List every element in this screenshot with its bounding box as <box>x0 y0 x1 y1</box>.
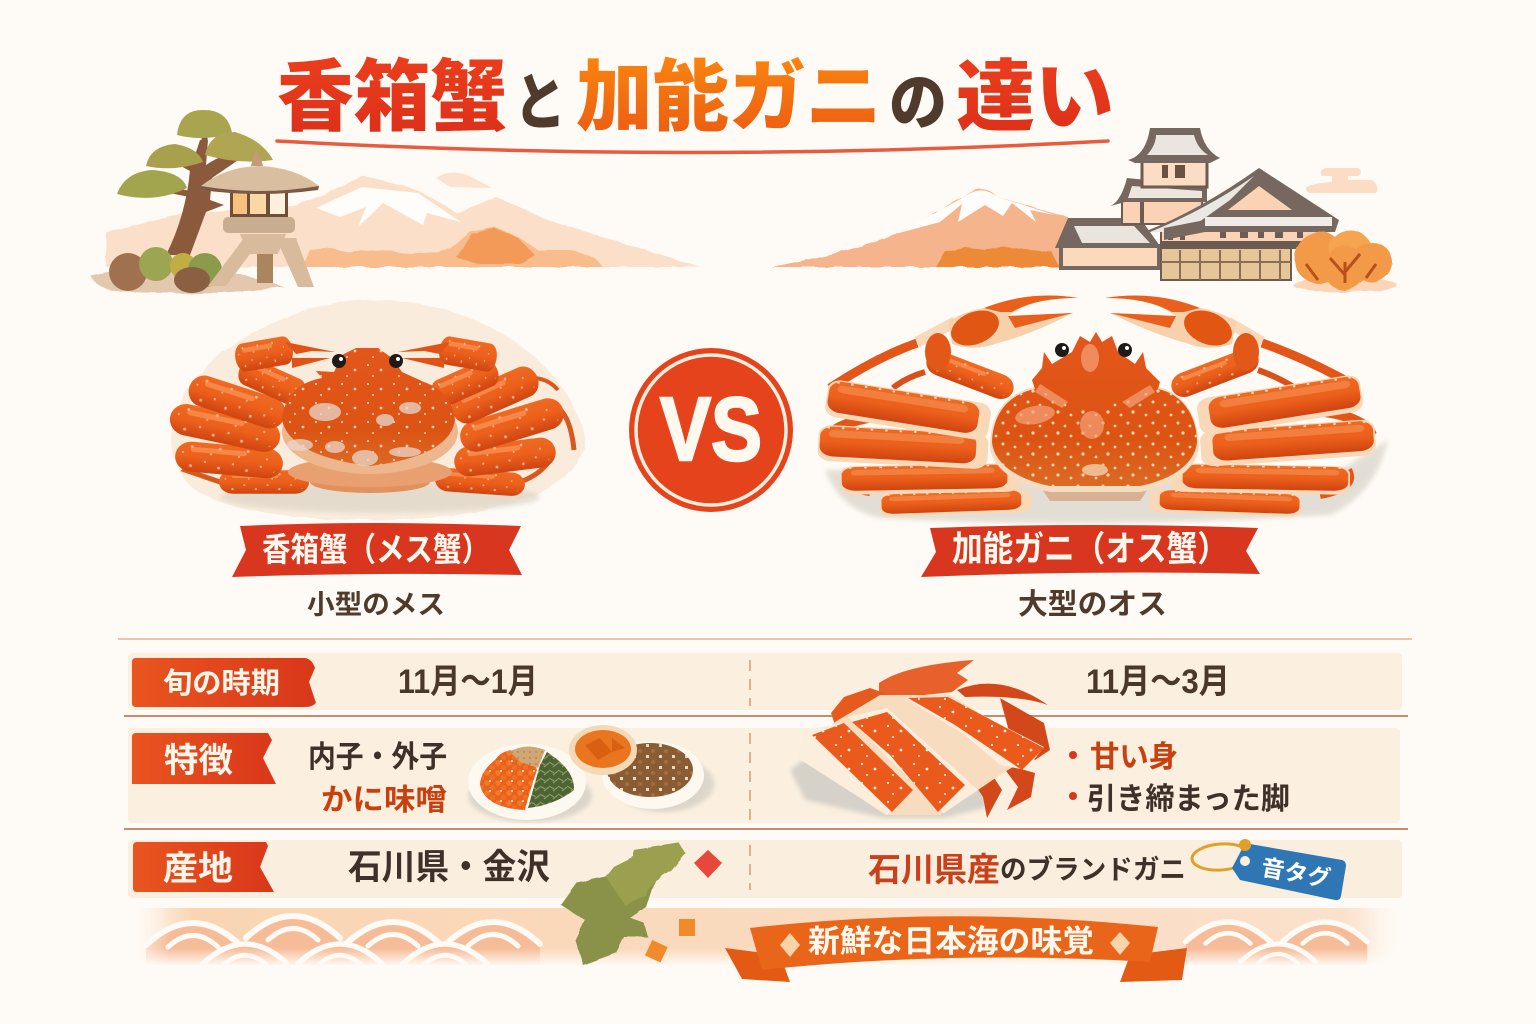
eyes <box>1055 343 1069 357</box>
icon: orange squares <box>645 919 695 963</box>
carapace <box>282 348 455 466</box>
shadow <box>825 440 1388 523</box>
VS badge <box>629 348 793 512</box>
top story <box>1142 160 1207 187</box>
panel: bottom wave band <box>120 905 1420 1005</box>
illustration: stone lantern <box>201 150 319 287</box>
icon: blue tag: 音タグ <box>1259 854 1333 892</box>
bottom banner: 新鮮な日本海の味覚 <box>808 924 1094 959</box>
icon: blue tag <box>1191 839 1346 900</box>
legs <box>167 362 574 497</box>
text: male crab subtitle: 大型のオス <box>1018 588 1167 621</box>
row 3: origin <box>133 842 1186 892</box>
wave pattern right <box>1186 922 1367 992</box>
left wing <box>1061 246 1159 268</box>
claws and arms <box>923 296 1262 403</box>
text: female crab subtitle: 小型のメス <box>307 590 445 620</box>
row 2: features <box>132 733 1290 817</box>
bottom banner <box>725 916 1187 982</box>
icon: snow cap <box>899 190 1055 233</box>
divider lines <box>118 638 1412 640</box>
piece right <box>905 697 1044 770</box>
second tier <box>1122 200 1202 224</box>
piece left <box>796 723 913 815</box>
row 2: features: 甘い身 <box>1090 741 1178 774</box>
plate main <box>468 744 586 820</box>
icon: autumn tree <box>1293 230 1397 292</box>
banner: female crab name: 香箱蟹（メス蟹） <box>262 531 490 568</box>
title <box>277 53 1114 141</box>
row 2: features: 引き締まった脚 <box>1087 783 1290 816</box>
VS badge: VS <box>660 380 762 480</box>
value: male origin: 石川県産 <box>868 851 1000 888</box>
panel: male crab <box>817 296 1388 523</box>
forest <box>301 227 603 267</box>
row 2: features: 特徴 <box>164 742 233 780</box>
carapace <box>990 332 1199 492</box>
row 3: origin: のブランドガニ <box>1000 854 1186 885</box>
claws <box>233 335 503 410</box>
label tag <box>132 733 276 784</box>
value: male season: 11月～3月 <box>1086 663 1230 701</box>
icon: location diamond <box>694 850 722 878</box>
row 1: season: 旬の時期 <box>163 667 280 700</box>
piece middle <box>848 708 978 813</box>
bushes <box>109 253 147 291</box>
title: 香箱蟹 <box>277 53 507 141</box>
title: の <box>889 69 947 138</box>
label tag <box>132 658 316 707</box>
backdrop wash <box>171 300 585 520</box>
row 1: season <box>132 658 1230 707</box>
icon: snow cap <box>316 187 461 227</box>
panel: female crab <box>167 300 585 520</box>
icon: Ishikawa map <box>561 843 685 965</box>
value: female origin: 石川県・金沢 <box>348 848 550 887</box>
illustration: crab roe plates <box>468 725 714 822</box>
text: female features: 内子・外子 <box>308 741 447 774</box>
text: male features <box>1069 751 1077 759</box>
main gable <box>1144 168 1339 232</box>
icon: cloud <box>436 172 492 188</box>
left claw <box>948 296 1078 348</box>
illustration: pine tree <box>91 110 284 293</box>
frost patches <box>287 402 421 466</box>
backing <box>800 695 1040 815</box>
illustration: right mountain <box>771 190 1068 267</box>
lower shell <box>310 471 430 493</box>
main wall <box>1161 228 1319 248</box>
dark claws <box>957 684 1050 818</box>
top claw <box>879 660 974 700</box>
label tag <box>133 842 274 892</box>
legs <box>817 374 1377 517</box>
highlights <box>1014 344 1155 439</box>
plate right <box>602 741 704 809</box>
illustration: castle <box>1055 128 1339 280</box>
title: 加能ガニ <box>576 53 882 141</box>
banner: male crab name: 加能ガニ（オス蟹） <box>952 530 1228 569</box>
banner: male crab name <box>921 525 1260 577</box>
title underline <box>277 141 1108 152</box>
wave pattern left <box>146 916 540 998</box>
icon: small cloud <box>1306 168 1377 193</box>
bowl <box>569 725 637 775</box>
panel: table row backgrounds <box>124 653 1408 898</box>
eyes <box>332 354 346 368</box>
shadow <box>220 481 540 513</box>
title: と <box>514 69 566 138</box>
banner: female crab name <box>232 523 522 577</box>
title: 達い <box>956 53 1114 141</box>
row 2: features: かに味噌 <box>321 784 447 817</box>
bush <box>936 247 1059 267</box>
thin back legs <box>830 322 1372 495</box>
lower shell <box>1040 486 1150 501</box>
illustration: left mountain landscape <box>106 172 700 267</box>
right claw <box>1105 296 1236 348</box>
row 3: origin: 産地 <box>163 850 233 888</box>
illustration: crab leg pile <box>790 660 1050 818</box>
value: female season: 11月～1月 <box>398 663 538 701</box>
